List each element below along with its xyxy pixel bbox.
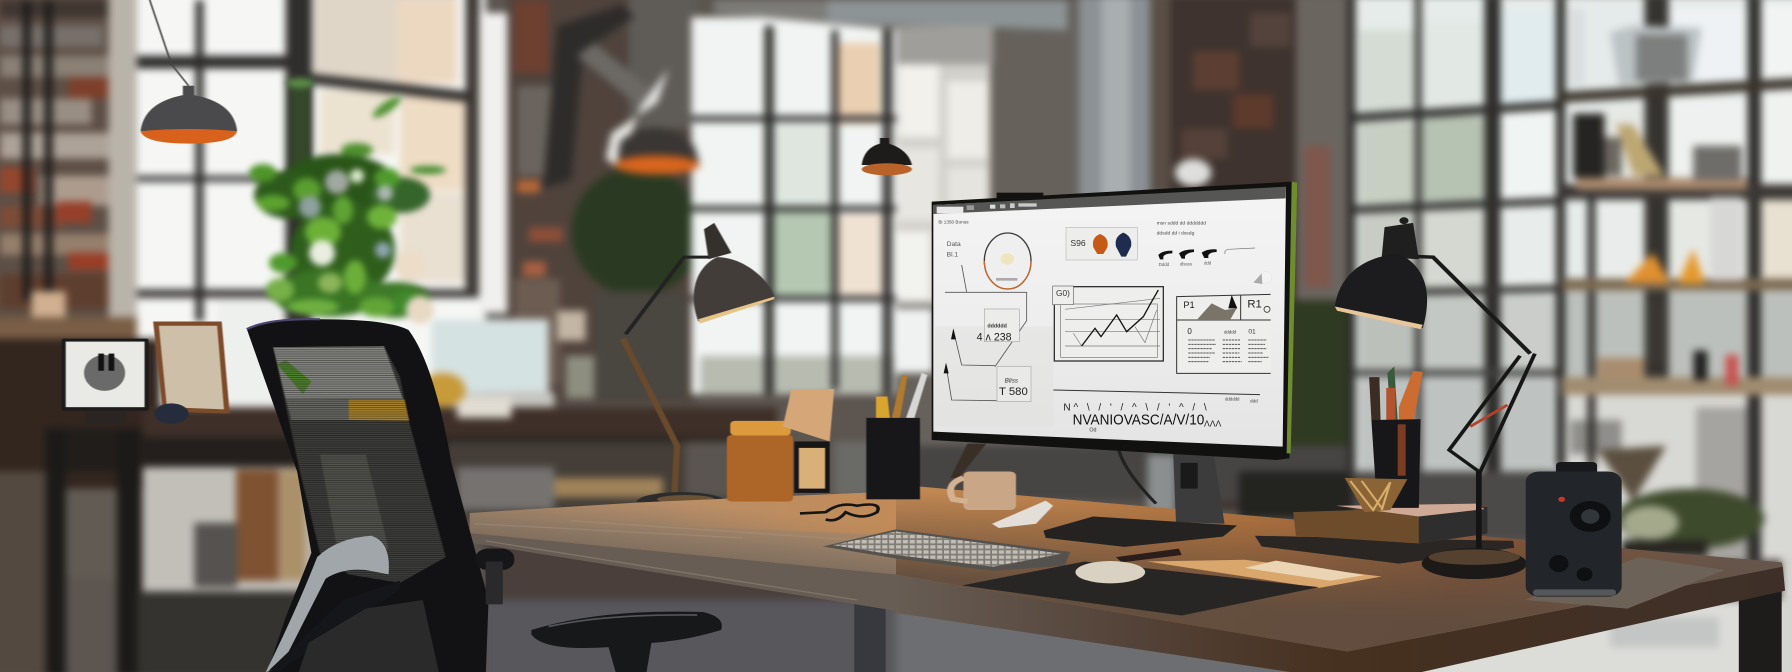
orange jar [727,421,793,501]
screen table panel: 01 [1248,328,1256,335]
screen weather tile with two drops [1066,227,1137,260]
monitor screen [933,188,1286,447]
monitor stand [1043,450,1237,547]
screen small heading: Bi 1350 Bonus [938,219,969,224]
screen timeline axis: NVANIOVASC/A/V/10 [1073,413,1204,429]
shelf objects [1573,26,1742,386]
right window wall [1347,0,1792,561]
screen arrow icons: ddd [1204,261,1212,266]
desk lamp [1335,217,1535,579]
mouse [1075,561,1145,583]
screen arrow icons: Dddd [1159,262,1170,267]
screen line chart: G0) [1056,288,1070,298]
screen timeline axis: Od [1089,427,1096,433]
mouse mat [962,561,1319,615]
background right half [827,0,1792,672]
right window panes [691,0,943,394]
shelf boards [1559,77,1792,395]
floor under desk [896,557,1792,672]
main desk, left section [470,491,914,672]
spiral notebook [1116,549,1182,562]
gold wire bowl [1345,478,1407,512]
foreground, left half [62,0,914,672]
screen table panel: R1 [1247,298,1262,310]
screen value card one: 4 ᴧ 238 [977,332,1012,344]
background left half [0,0,943,672]
screen data label: Bl.1 [947,252,958,259]
hanging lamp, arm and shade [543,4,700,189]
screen timeline axis: ΛΛΛ [1204,419,1222,429]
screen table panel: 0 [1187,327,1192,336]
left window panes [137,0,510,420]
brick wall [0,0,120,343]
pencil holder at left [866,373,927,499]
screen arrow icons: dlssss [1180,261,1192,266]
screen weather tile with two drops: S96 [1070,238,1086,248]
pendant lamp left [141,0,237,144]
screen tab bar [937,203,1037,213]
rear wall, far window and column [827,0,1353,519]
book stack [1255,504,1514,564]
chair lower mesh [297,600,440,672]
screen timeline axis: dddddd [1225,397,1240,402]
paper [1147,560,1382,588]
main desk, right section [896,486,1785,672]
screen top right captions: msn sddd dd ddddddd [1157,221,1206,227]
note stand [783,389,834,493]
brick column [507,0,703,403]
screen data label: Data [947,241,961,248]
camera speaker [1526,462,1622,597]
office chair [247,319,722,672]
pen holder with pens [1369,366,1423,508]
napkin [992,501,1053,528]
screen value card one [977,309,1019,344]
screen timeline axis: ddd [1250,398,1258,403]
glasses [800,505,878,520]
framed tablet with doodle [62,339,149,423]
screen value card one: dddddd [987,323,1007,329]
screen connector lines [944,265,1027,401]
chair back frame [247,319,489,672]
screen timeline axis: N^ \ / ' / ^ \ / ' ^ / \ [1063,403,1207,414]
screen gauge circle [984,233,1031,289]
screen pale badge [1253,271,1272,284]
screen top right captions [1157,221,1206,237]
screen value card two: T 580 [999,386,1028,398]
screen table panel [1177,294,1271,373]
screen timeline axis [1053,390,1260,433]
laptop and desk clutter, blurred [420,319,554,418]
chair lumbar support [266,536,389,672]
plant [249,78,446,324]
back desk and shelf [0,300,914,672]
chair armrest [531,612,722,672]
screen arrow icons [1158,248,1255,267]
screen table panel: ddddd [1224,329,1237,334]
back support behind monitor [950,444,986,478]
small pendant [862,138,912,175]
desk lamp on far side [623,223,774,513]
monitor [932,182,1297,460]
keyboard [823,529,1070,571]
screen data label [947,241,961,259]
screen value card two [997,367,1031,402]
screen line chart [1053,286,1163,361]
foreground, right half [823,217,1785,672]
chair armrest stub [475,549,514,570]
potted plant by the window [1598,446,1765,557]
coffee mug [950,471,1016,510]
pillar [109,0,138,334]
wooden picture frame [153,321,230,424]
chair mesh panel [273,346,446,583]
monitor frame [932,182,1297,460]
screen top right captions: ddsdd dd i dssdg [1157,231,1195,237]
screen table panel: P1 [1183,300,1195,310]
screen value card two: Bliss [1005,377,1019,384]
